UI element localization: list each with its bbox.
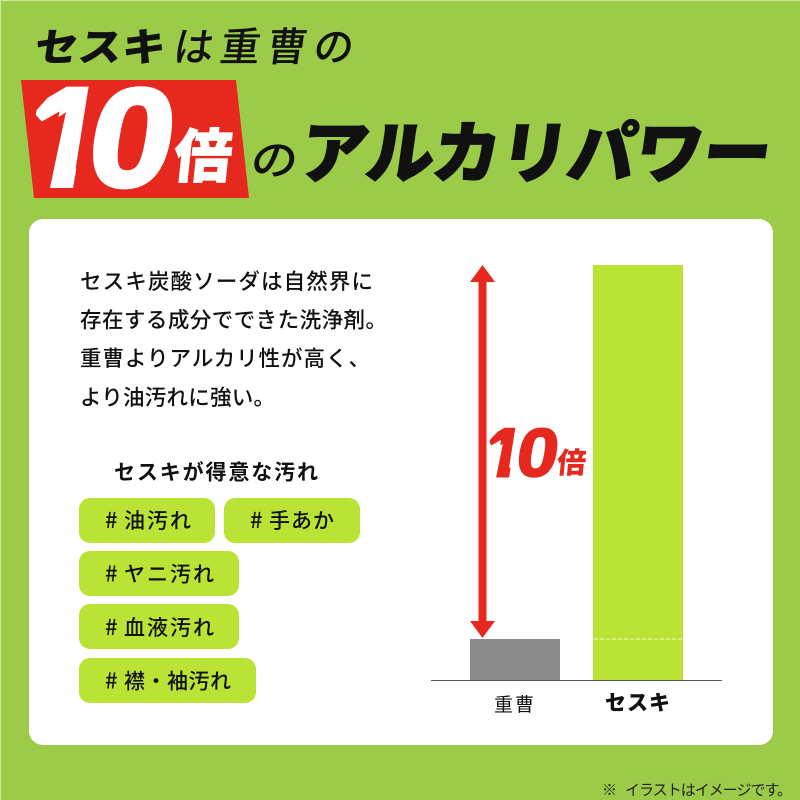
footnote: ※ (602, 779, 617, 800)
bar: セスキ (593, 265, 683, 680)
tag: ヤニ汚れ: # (105, 556, 118, 588)
tag: 手あか: 手あか (269, 505, 334, 535)
tag: 油汚れ: # (105, 503, 118, 535)
title line 2: の (247, 126, 303, 187)
bar chart (431, 265, 722, 717)
bar: 重曹 (470, 639, 560, 680)
10倍 label: 0 (512, 416, 564, 491)
tag: 血液汚れ (79, 604, 239, 649)
10倍 label (490, 428, 586, 478)
title red badge: 10倍: 倍 (170, 110, 237, 194)
tag: 血液汚れ: # (105, 610, 118, 642)
description text: 重曹よりアルカリ性が高く、 (80, 342, 370, 373)
tag: ヤニ汚れ (79, 551, 239, 596)
10倍 label: 1 (479, 415, 528, 491)
description text: セスキ炭酸ソーダは自然界に (80, 265, 373, 296)
tag: 襟・袖汚れ (79, 658, 256, 703)
title red badge: 10倍: 1 (13, 59, 116, 216)
tag: 油汚れ: 油汚れ (124, 505, 191, 535)
title line 1: セスキ (31, 16, 170, 72)
white panel (29, 219, 773, 745)
description text: 存在する成分でできた洗浄剤。 (80, 304, 387, 334)
title red badge: 10倍: 0 (78, 60, 187, 217)
10倍 label: 倍 (555, 440, 588, 482)
tag: 油汚れ (79, 498, 215, 543)
description text: より油汚れに強い。 (80, 381, 275, 412)
tag: 襟・袖汚れ: # (105, 664, 118, 696)
label: セスキ: セスキ (605, 687, 670, 717)
title red badge: 10倍 (21, 80, 249, 198)
title line 1 (31, 14, 359, 73)
tag: 血液汚れ: 血液汚れ (124, 612, 214, 642)
double-headed red arrow (470, 265, 495, 638)
tag: ヤニ汚れ: ヤニ汚れ (124, 558, 214, 588)
tag: 襟・袖汚れ: 襟・袖汚れ (124, 666, 231, 696)
label: 重曹: 重曹 (494, 690, 534, 717)
title line 1: は重曹の (170, 14, 359, 73)
title line 2: アルカリパワー (294, 101, 779, 197)
tag: 手あか: # (250, 503, 263, 535)
tags heading: セスキが得意な汚れ (114, 456, 318, 486)
tag: 手あか (224, 498, 360, 543)
description text (80, 265, 387, 412)
footnote: イラストはイメージです。 (625, 779, 792, 800)
